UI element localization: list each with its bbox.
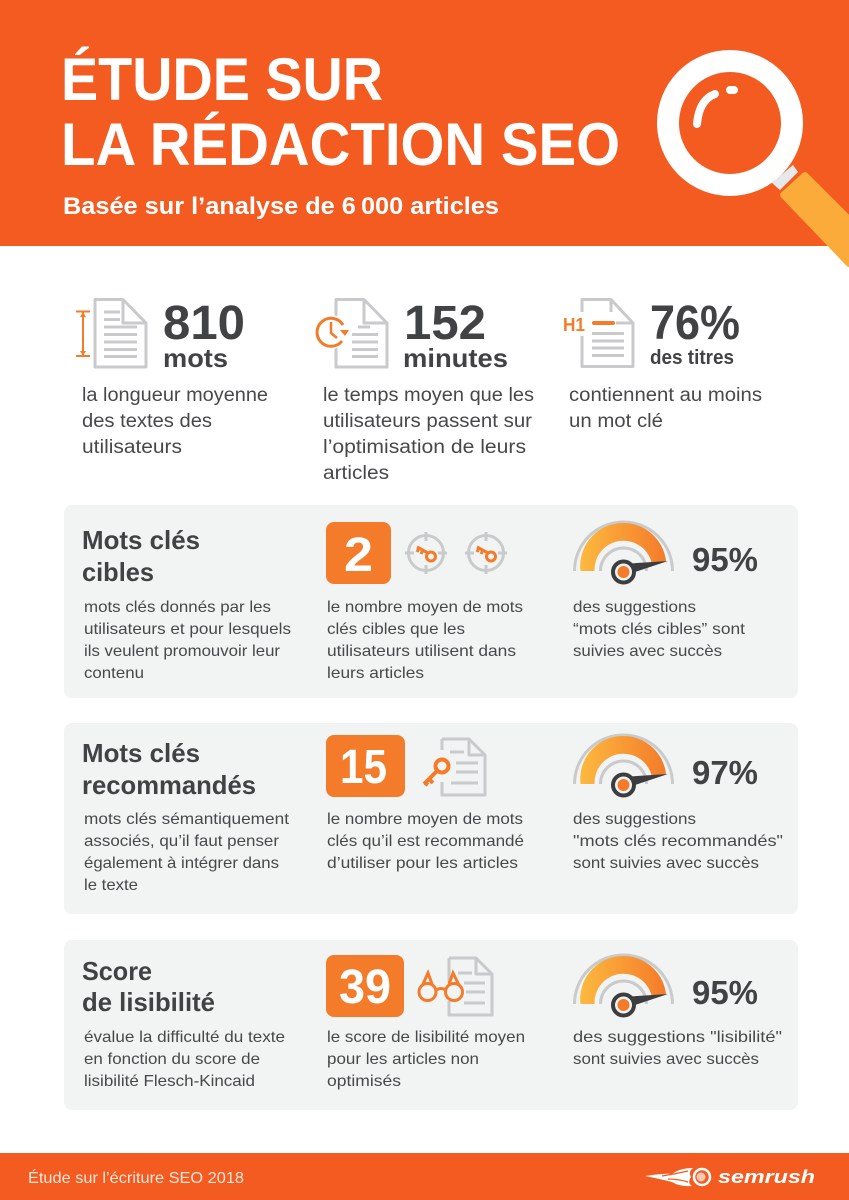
definition text: ils veulent promouvoir leur [84, 643, 281, 660]
footer [0, 1153, 849, 1200]
panel: mots clés recommandés [64, 723, 798, 914]
heading: de lisibilité [82, 987, 215, 1017]
gauge: 95% [574, 955, 672, 1016]
icon: document with H1 [560, 300, 633, 366]
icon: glasses and document [419, 958, 492, 1015]
text block: contiennent au moins [569, 385, 762, 406]
heading [82, 738, 256, 800]
text block [327, 811, 524, 872]
logo: semrush [645, 1167, 815, 1187]
panel: mots clés cibles: 95% [692, 541, 758, 578]
text block: leurs articles [327, 665, 424, 682]
text block: l’optimisation de leurs [323, 437, 526, 458]
icon: target key 2 [465, 532, 507, 574]
heading [82, 956, 215, 1017]
heading [82, 525, 200, 587]
stat: 76% des titres: 76% [650, 297, 740, 350]
text block: clés qu’il est recommandé [327, 833, 524, 850]
subtitle: Basée sur l’analyse de 6 000 articles [63, 193, 499, 220]
icon: document with H1: H1 [563, 315, 585, 335]
text block: "mots clés recommandés" [573, 833, 783, 850]
panel: mots clés cibles [64, 505, 798, 698]
stat: 810 mots [76, 297, 268, 458]
text block: le nombre moyen de mots [327, 599, 523, 616]
text block: le score de lisibilité moyen [327, 1029, 525, 1046]
logo: semrush: semrush [718, 1167, 815, 1187]
text block: le nombre moyen de mots [327, 811, 523, 828]
text block: pour les articles non [327, 1051, 479, 1068]
text block [327, 1029, 525, 1090]
header banner [0, 0, 849, 246]
text block [573, 811, 783, 872]
definition text: mots clés donnés par les [84, 599, 271, 616]
icon: document with clock [314, 300, 387, 367]
icon: key and document [424, 739, 485, 795]
text block [327, 599, 523, 682]
stat: 810 mots: 810 [163, 297, 245, 350]
footer text: Étude sur l’écriture SEO 2018 [28, 1168, 244, 1187]
title [61, 46, 620, 178]
text block [82, 385, 268, 458]
definition text [84, 1029, 285, 1090]
definition text [84, 599, 291, 682]
heading: cibles [82, 557, 154, 587]
text block: utilisateurs [82, 437, 182, 458]
heading: recommandés [82, 770, 256, 800]
definition text: évalue la difficulté du texte [84, 1029, 285, 1046]
text block: un mot clé [569, 411, 663, 432]
text block [573, 1029, 782, 1068]
heading: Mots clés [82, 525, 200, 555]
text block: d’utiliser pour les articles [327, 855, 518, 872]
text block: suivies avec succès [573, 643, 722, 660]
number badge: 2: 2 [344, 529, 373, 582]
title: LA RÉDACTION SEO [61, 111, 620, 178]
definition text: en fonction du score de [84, 1051, 260, 1068]
definition text: associés, qu’il faut penser [84, 833, 280, 850]
text block: des suggestions [573, 811, 696, 828]
definition text: contenu [84, 665, 144, 682]
icon: document with height arrow [76, 300, 146, 367]
text block: des textes des [82, 411, 212, 432]
number badge: 2 [326, 522, 391, 584]
definition text: également à intégrer dans [84, 855, 279, 872]
stat: 152 minutes [314, 297, 534, 484]
text block: articles [323, 463, 389, 484]
text block: “mots clés cibles” sont [573, 621, 746, 638]
text block: des suggestions [573, 599, 696, 616]
panel: mots clés recommandés: 97% [692, 754, 758, 791]
number badge: 15 [326, 735, 405, 797]
panel: score de lisibilité [64, 940, 798, 1110]
text block: des suggestions "lisibilité" [573, 1029, 782, 1046]
text block: le temps moyen que les [323, 385, 534, 406]
heading: Score [82, 956, 152, 986]
text block: la longueur moyenne [82, 385, 268, 406]
definition text: utilisateurs et pour lesquels [84, 621, 291, 638]
icon: target key 1 [405, 532, 447, 574]
panel: score de lisibilité: 95% [692, 974, 758, 1011]
stat: 76% des titres: des titres [650, 347, 734, 369]
number badge: 15: 15 [340, 741, 387, 794]
number badge: 39: 39 [339, 961, 391, 1014]
text block: clés cibles que les [327, 621, 465, 638]
definition text: lisibilité Flesch-Kincaid [84, 1073, 255, 1090]
icon: magnifying glass [668, 61, 849, 264]
number badge: 39 [326, 955, 404, 1017]
definition text: mots clés sémantiquement [84, 811, 290, 828]
stat: 152 minutes: minutes [403, 343, 508, 373]
text block: sont suivies avec succès [573, 855, 759, 872]
definition text: le texte [84, 877, 138, 894]
heading: Mots clés [82, 738, 200, 768]
text block [573, 599, 746, 660]
stat: 76% des titres [560, 297, 762, 432]
stat: 810 mots: mots [163, 343, 228, 373]
text block: sont suivies avec succès [573, 1051, 759, 1068]
gauge: 97% [574, 735, 672, 796]
title: ÉTUDE SUR [61, 46, 383, 113]
text block: optimisés [327, 1073, 401, 1090]
text block [569, 385, 762, 432]
text block: utilisateurs passent sur [323, 411, 533, 432]
stat: 152 minutes: 152 [404, 297, 486, 350]
text block: utilisateurs utilisent dans [327, 643, 516, 660]
text block [323, 385, 534, 484]
definition text [84, 811, 290, 894]
gauge: 95% [574, 522, 672, 582]
